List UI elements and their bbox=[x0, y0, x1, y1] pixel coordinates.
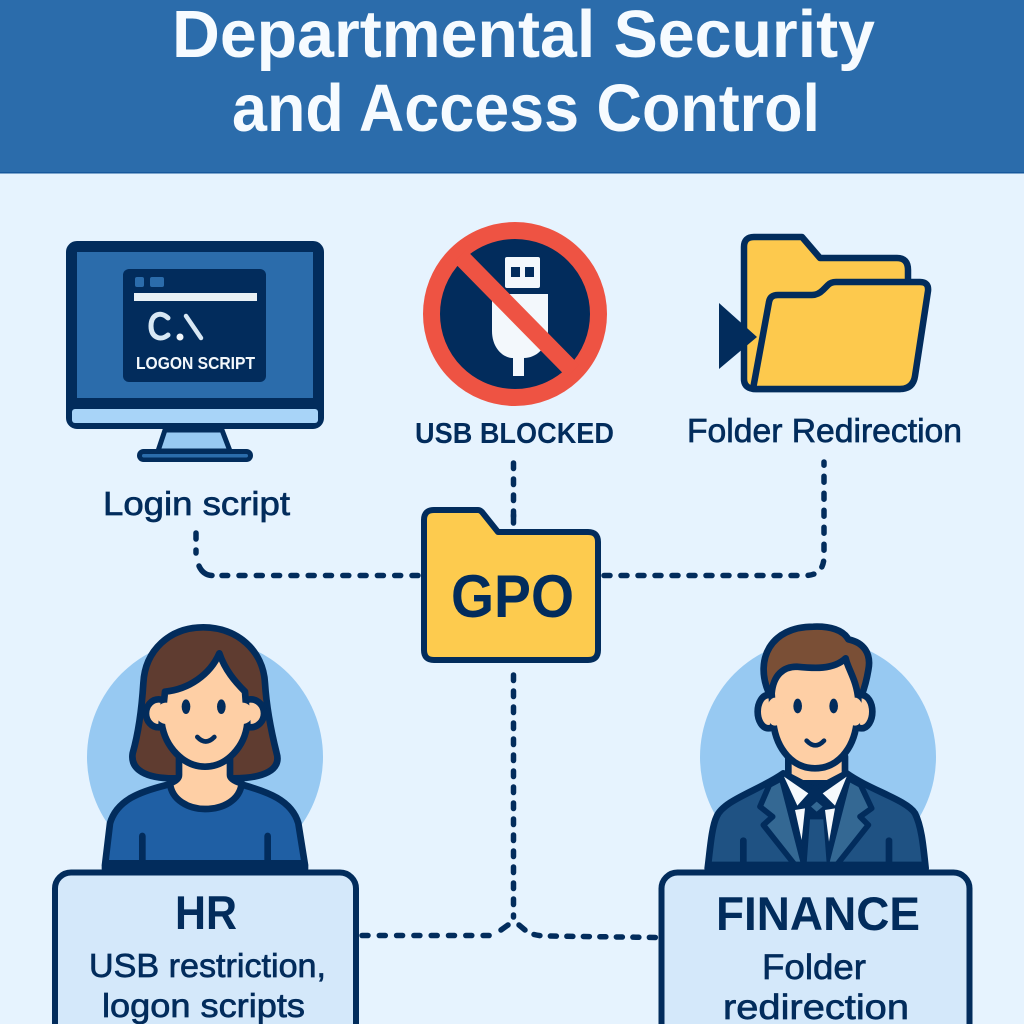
panel: HR: logon scripts bbox=[102, 987, 305, 1024]
panel: Finance bbox=[662, 872, 970, 1024]
avatar: HR woman bbox=[87, 627, 323, 875]
panel: HR: USB restriction, bbox=[89, 947, 326, 984]
GPO folder bbox=[424, 510, 598, 660]
label: folder redirection: Folder Redirection bbox=[687, 412, 962, 449]
label: login script: Login script bbox=[103, 485, 290, 522]
dashed connectors bbox=[196, 462, 824, 938]
icon: folder redirection bbox=[719, 237, 928, 389]
title bbox=[172, 0, 875, 146]
label: USB blocked: USB BLOCKED bbox=[415, 418, 614, 450]
icon: monitor with logon script bbox=[69, 244, 321, 462]
GPO folder: GPO bbox=[451, 563, 574, 630]
panel: HR: HR bbox=[175, 886, 237, 939]
panel: Finance: Folder bbox=[762, 948, 866, 987]
title: and Access Control bbox=[232, 71, 820, 146]
header banner bbox=[0, 0, 1024, 174]
avatar: Finance man bbox=[700, 627, 936, 875]
panel: Finance: FINANCE bbox=[716, 887, 920, 940]
icon: USB blocked bbox=[432, 230, 598, 398]
panel: HR bbox=[55, 872, 356, 1024]
icon: monitor with logon script: LOGON SCRIPT bbox=[136, 353, 255, 373]
